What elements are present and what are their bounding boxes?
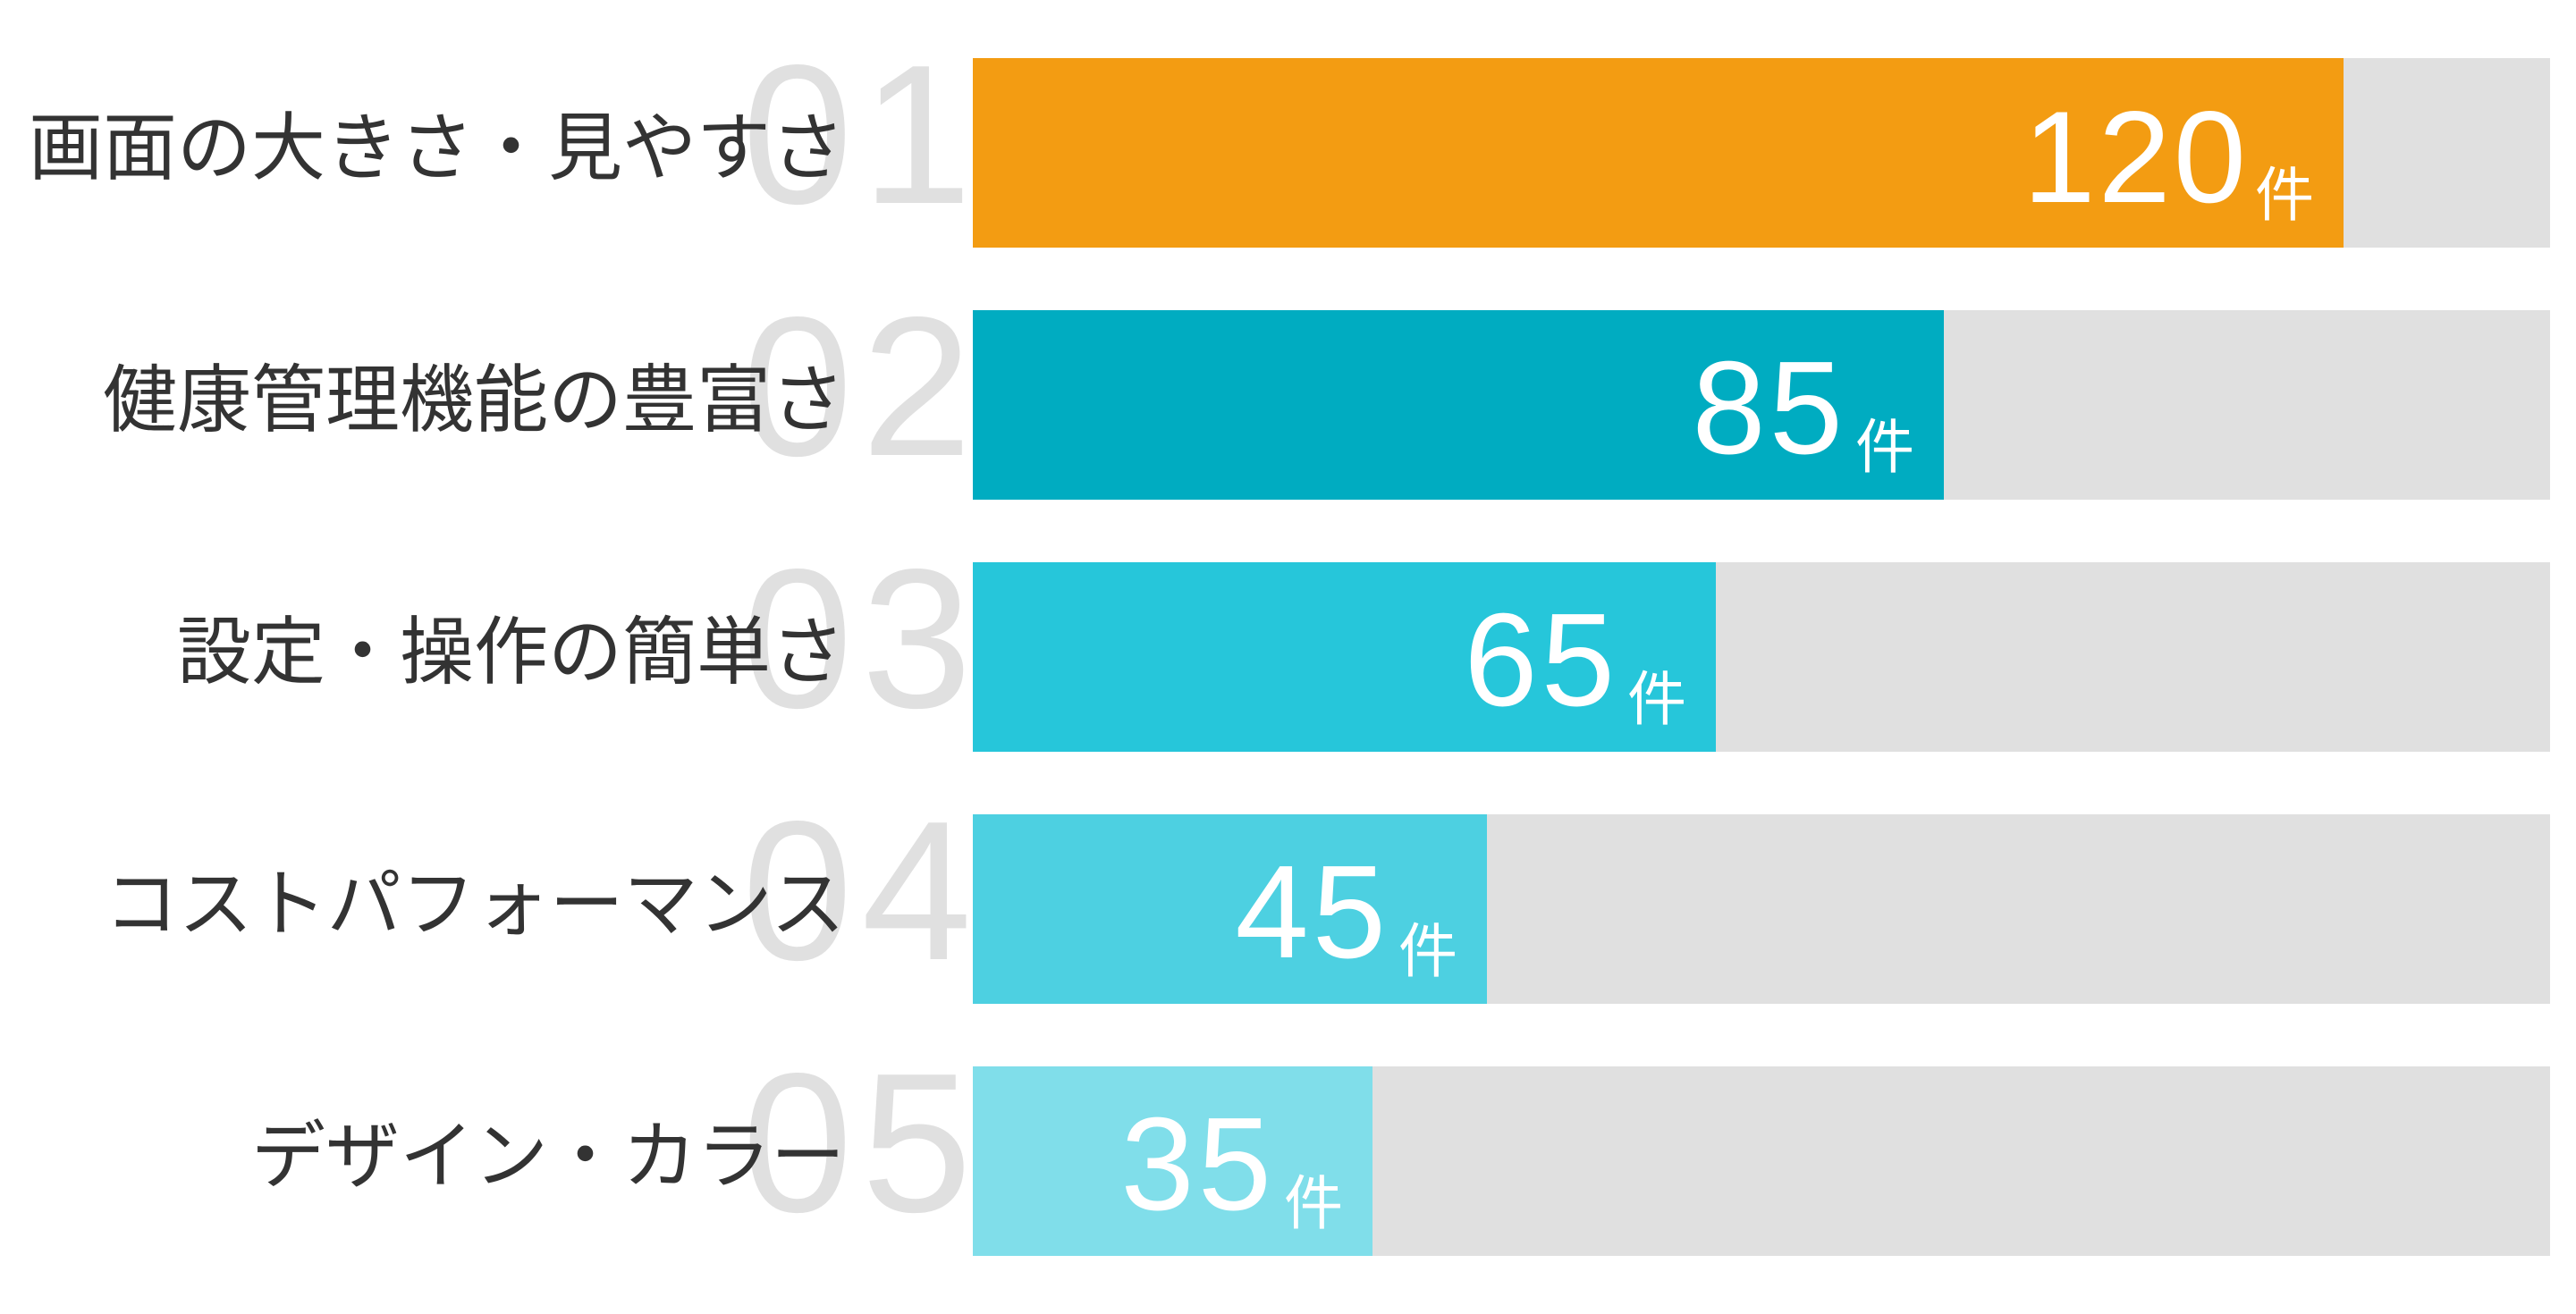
rank number 02: 02 <box>742 276 981 498</box>
label 3: 設定・操作の簡単さ <box>177 592 845 699</box>
row 3: 設定・操作の簡単さ <box>177 528 2550 752</box>
bar fill 1 with value <box>973 58 2344 248</box>
row 2: 健康管理機能の豊富さ <box>103 276 2550 500</box>
label 2: 健康管理機能の豊富さ <box>103 340 845 447</box>
label 1: 画面の大きさ・見やすさ <box>29 88 845 195</box>
bar track 5 <box>973 1066 2550 1256</box>
value 65: 65 <box>1464 586 1618 734</box>
value 85: 85 <box>1692 334 1846 482</box>
unit 1: 件 <box>2255 147 2314 233</box>
bar track 2 <box>973 310 2550 500</box>
bar track 4 <box>973 814 2550 1004</box>
bar fill 3 with value <box>973 562 1716 752</box>
bar track 3 <box>973 562 2550 752</box>
label 5: デザイン・カラー <box>251 1096 845 1203</box>
unit 2: 件 <box>1855 400 1914 485</box>
row 1: 画面の大きさ・見やすさ <box>29 24 2550 248</box>
rank number 04: 04 <box>742 780 981 1002</box>
rank number 01: 01 <box>742 24 981 246</box>
value 35: 35 <box>1120 1091 1275 1238</box>
unit 5: 件 <box>1284 1156 1343 1242</box>
bar track 1 <box>973 58 2550 248</box>
label 4: コストパフォーマンス <box>105 844 845 951</box>
row 5: デザイン・カラー <box>251 1032 2550 1256</box>
unit 3: 件 <box>1627 652 1686 737</box>
bar fill 2 with value <box>973 310 1944 500</box>
unit 4: 件 <box>1398 904 1457 990</box>
row 4: コストパフォーマンス <box>105 780 2550 1004</box>
value 120: 120 <box>2023 84 2249 230</box>
value 45: 45 <box>1235 838 1389 986</box>
rank number 03: 03 <box>742 528 981 750</box>
rank number 05: 05 <box>742 1032 981 1254</box>
bar fill 4 with value <box>973 814 1487 1004</box>
bar fill 5 with value <box>973 1066 1372 1256</box>
